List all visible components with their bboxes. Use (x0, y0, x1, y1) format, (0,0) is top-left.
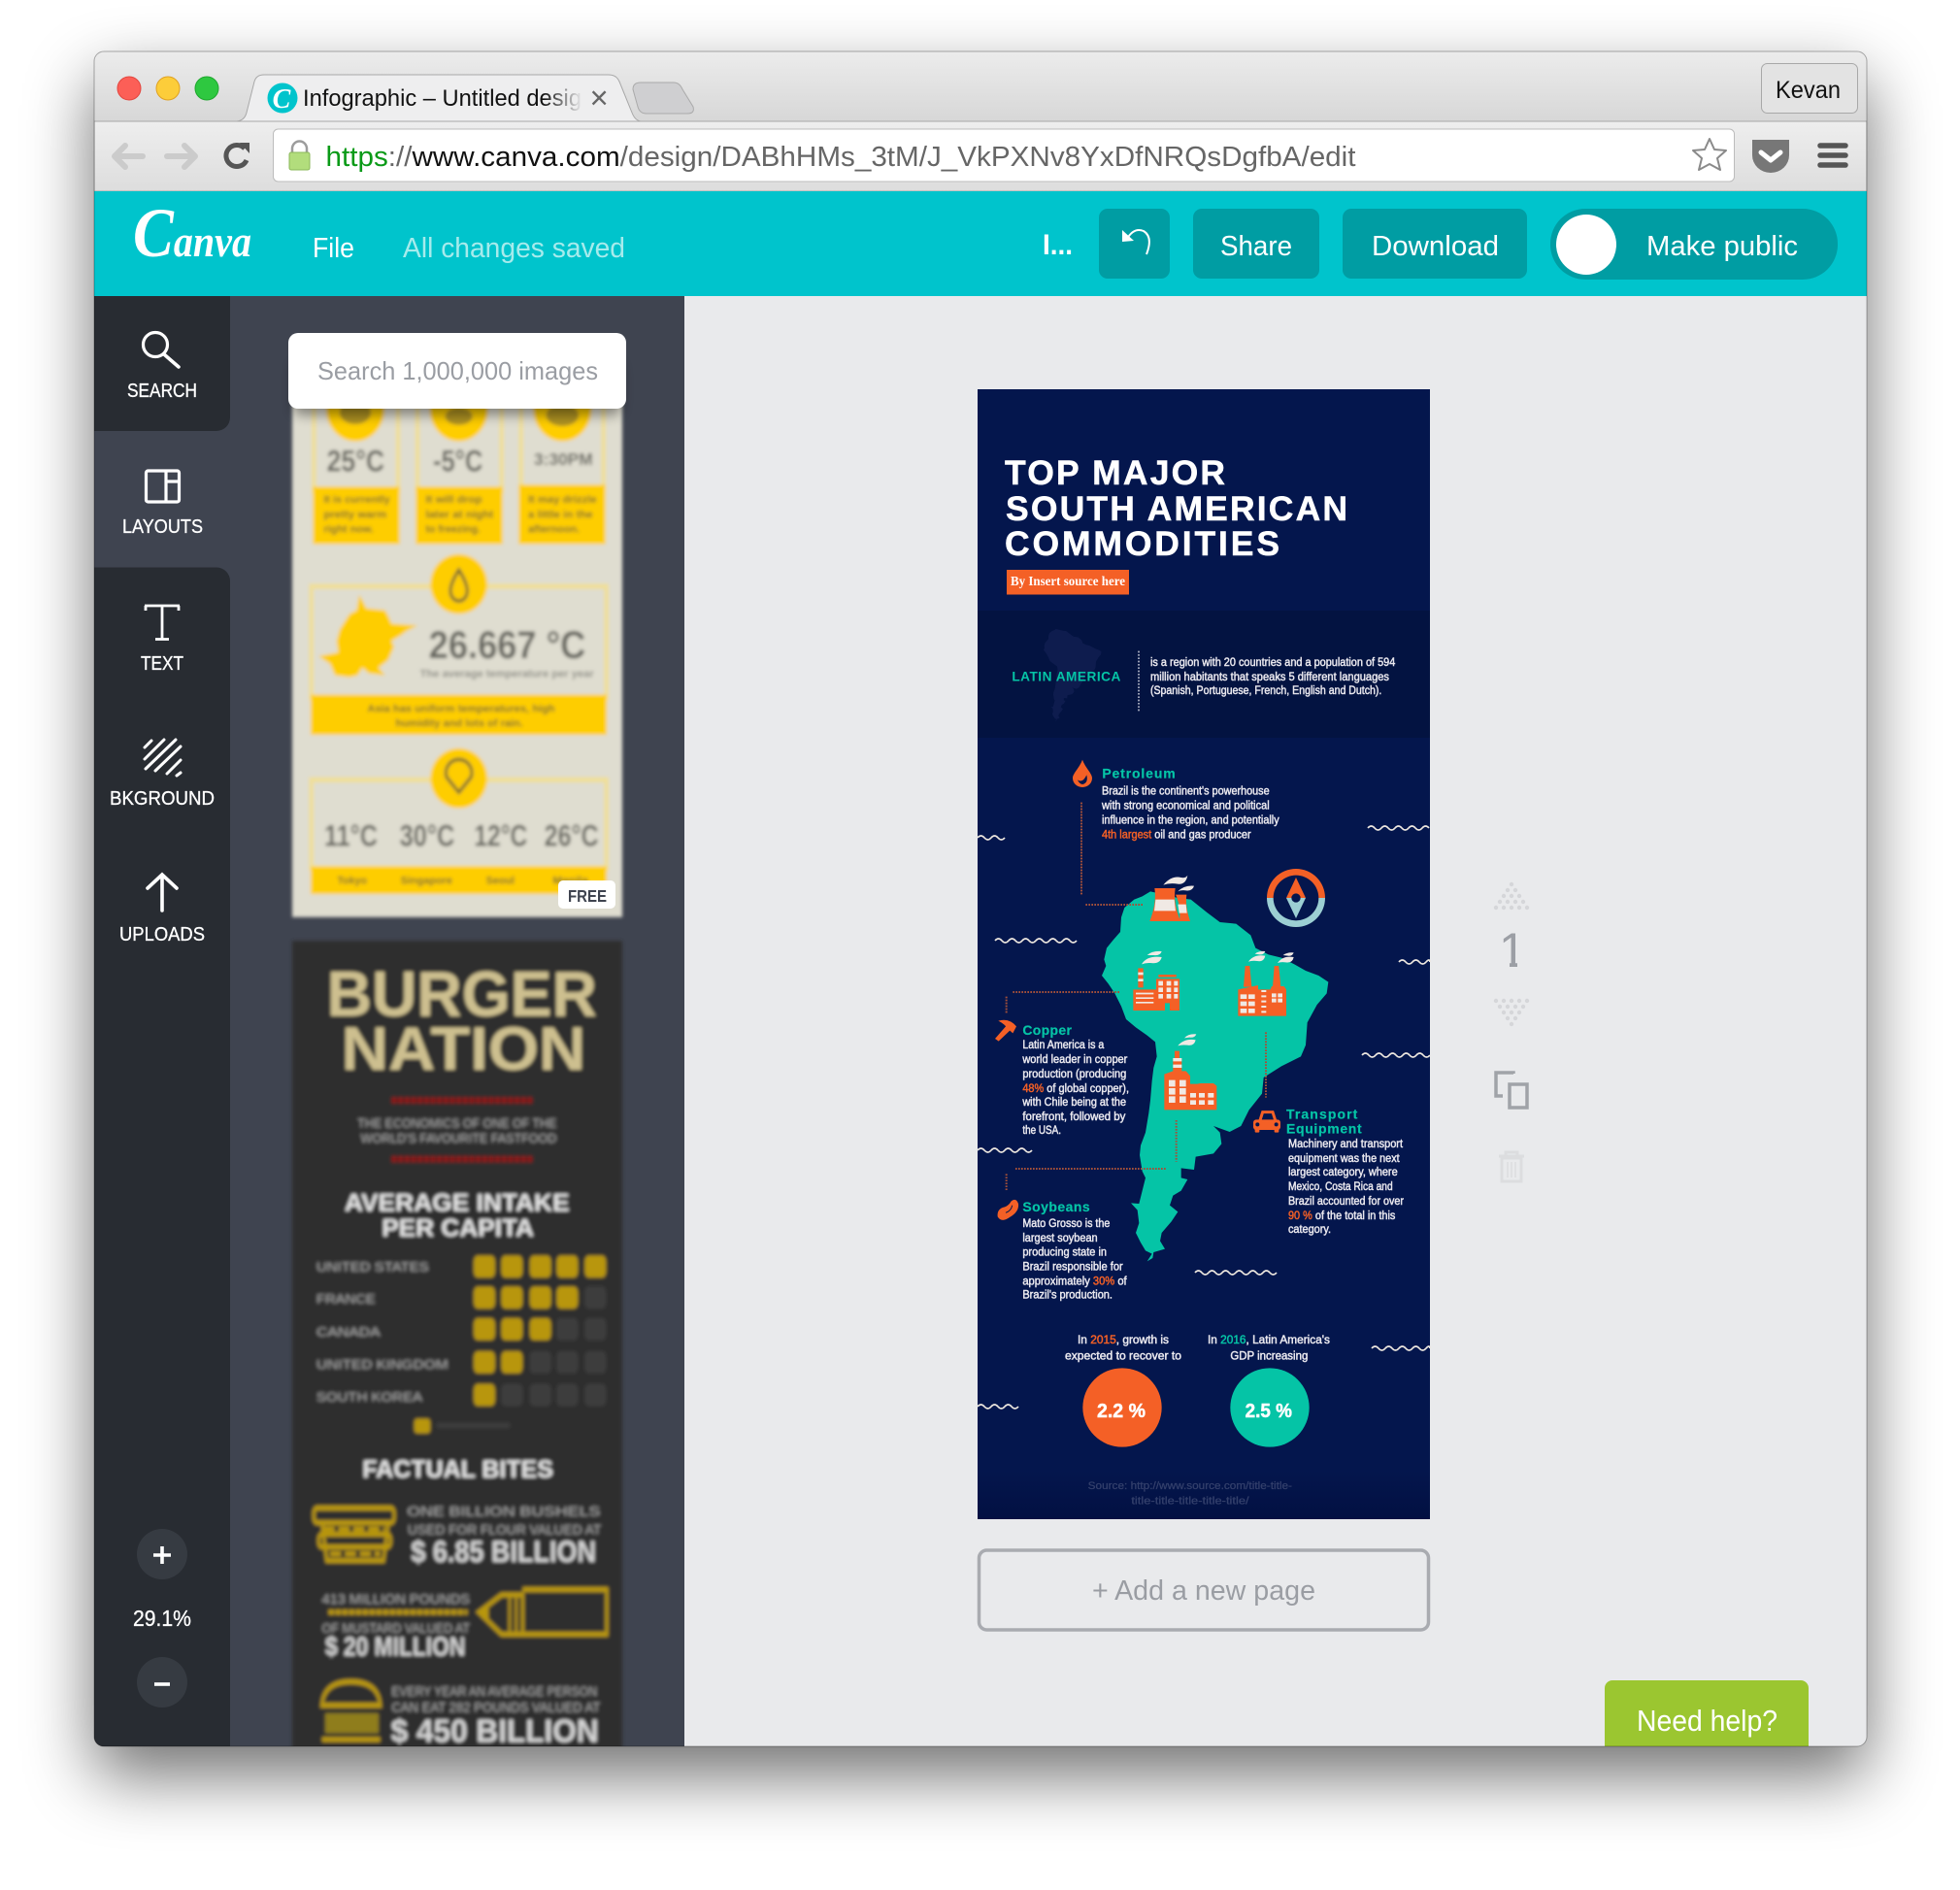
template thumbnail: burger nation: USED FOR FLOUR VALUED AT (408, 1523, 601, 1538)
template thumbnail: weather: 30°C (400, 820, 454, 853)
template thumbnail: burger nation: WORLD'S FAVOURITE FASTFOOD (361, 1132, 557, 1145)
icon: pocket (1752, 140, 1789, 173)
Canva logo: Canva (133, 194, 251, 272)
zoom level: 29.1% (133, 1606, 191, 1631)
copper text: 48% of global copper), (1022, 1081, 1129, 1095)
source note: title-title-title-title-title/ (1131, 1495, 1250, 1507)
text tab (141, 606, 183, 675)
File menu: File (313, 233, 354, 264)
icon: compass (1267, 869, 1325, 927)
template thumbnail: weather: 26°C (545, 820, 599, 853)
footer band background (978, 1471, 1430, 1519)
template thumbnail: burger nation: PER CAPITA (382, 1215, 534, 1242)
soybeans text: approximately 30% of (1022, 1274, 1127, 1287)
uploads tab: UPLOADS (119, 924, 205, 945)
template thumbnail: weather: -5°C (433, 445, 482, 479)
search input (288, 333, 626, 415)
petroleum text (1101, 783, 1279, 841)
latin america description: million habitants that speaks 5 different languages (1150, 670, 1389, 683)
undo button (1099, 209, 1170, 279)
title: SOUTH AMERICAN (1006, 489, 1347, 528)
make public toggle: Make public (1646, 231, 1798, 262)
copper text: Latin America is a (1022, 1038, 1105, 1051)
search tab (127, 332, 197, 402)
download button: Download (1372, 231, 1499, 262)
icon: hammer (995, 1020, 1016, 1042)
template thumbnail: weather: humidity and lots of rain. (395, 718, 523, 730)
template thumbnail: burger nation: $ 6.85 BILLION (411, 1534, 596, 1569)
template thumbnail: burger nation: FACTUAL BITES (362, 1456, 553, 1483)
zoom in button (137, 1529, 187, 1579)
top navigation bar (94, 191, 1867, 296)
transport text: category. (1288, 1222, 1331, 1236)
download button (1343, 209, 1527, 279)
infographic page (978, 389, 1430, 1519)
wave decorations (978, 826, 1430, 1409)
latin america description: is a region with 20 countries and a population of 594 (1150, 655, 1396, 669)
tab close: × (590, 80, 609, 116)
template thumbnail: weather: It is currently (323, 494, 390, 506)
left tool sidebar (94, 296, 230, 1746)
transport text: Mexico, Costa Rica and (1288, 1179, 1393, 1193)
transport text (1288, 1137, 1404, 1236)
soybeans text: Brazil responsible for (1022, 1259, 1123, 1273)
tab title: Infographic – Untitled desig (303, 85, 581, 112)
search input: Search 1,000,000 images (317, 356, 598, 385)
free badge (558, 880, 615, 909)
icon: duplicate page (1496, 1073, 1527, 1108)
layouts tab (122, 471, 203, 538)
icon: soybean (998, 1200, 1018, 1220)
search tab: SEARCH (127, 381, 197, 402)
stat circle 2.5%: 2.5 % (1246, 1400, 1292, 1422)
icon: factory west (1133, 951, 1179, 1011)
free badge: FREE (568, 886, 607, 906)
template thumbnail: burger nation: 413 MILLION POUNDS (322, 1592, 470, 1608)
transport heading: Equipment (1286, 1120, 1362, 1136)
template thumbnail: burger nation: AVERAGE INTAKE (345, 1190, 570, 1216)
soybeans text: Brazil's production. (1022, 1287, 1113, 1301)
template thumbnail: weather: 26.667 °C (429, 623, 585, 667)
stat circle 2.5% (1230, 1368, 1310, 1447)
need help button: Need help? (1637, 1704, 1777, 1738)
icon: forward arrow (167, 146, 195, 167)
add a new page button: + Add a new page (1092, 1575, 1315, 1607)
soybeans text: Mato Grosso is the (1022, 1216, 1111, 1230)
template thumbnail: weather: 12°C (474, 820, 527, 853)
icon: lock (289, 142, 310, 170)
icon: cooling towers (1149, 876, 1194, 921)
bottom stats (1065, 1333, 1330, 1507)
template thumbnail: weather: afternoon. (528, 524, 580, 536)
add a new page button (979, 1550, 1429, 1630)
icon: factory east (1238, 951, 1294, 1016)
petroleum text: Brazil is the continent's powerhouse (1102, 783, 1270, 797)
source tag (1007, 570, 1129, 594)
favicon: C (273, 84, 291, 115)
template thumbnail: weather: 11°C (324, 820, 378, 853)
copper text: the USA. (1022, 1123, 1061, 1137)
title (1005, 453, 1347, 563)
copper text: production (producing (1022, 1067, 1126, 1080)
zoom out button (137, 1657, 187, 1708)
collapsed title: I... (1043, 229, 1073, 261)
latin america label: LATIN AMERICA (1012, 670, 1120, 684)
soybeans text: producing state in (1022, 1244, 1107, 1258)
active tab (237, 75, 641, 121)
template thumbnail: burger nation: CANADA (316, 1325, 382, 1340)
page number: 1 (1499, 923, 1526, 978)
page down control (1494, 999, 1529, 1026)
transport text: equipment was the next (1288, 1151, 1400, 1165)
source note: Source: http://www.source.com/title-title- (1088, 1480, 1292, 1492)
template thumbnail: weather: It may drizzle (528, 494, 597, 506)
share button: Share (1220, 231, 1292, 262)
copper text (1021, 1038, 1129, 1137)
layouts tab: LAYOUTS (122, 516, 203, 538)
background tab (110, 740, 215, 810)
template thumbnail: weather: Tokyo (337, 876, 367, 887)
template thumbnail: weather: It will drop (425, 494, 482, 506)
latin america block (1012, 651, 1396, 841)
inactive tab (633, 83, 693, 114)
stat text 2016 (1208, 1333, 1330, 1362)
copper heading: Copper (1022, 1022, 1073, 1038)
make public toggle (1550, 209, 1838, 280)
text tab: TEXT (141, 653, 183, 675)
south america map (1102, 891, 1328, 1261)
soybeans text (1022, 1216, 1127, 1301)
copper text: with Chile being at the (1021, 1095, 1126, 1109)
template thumbnail: burger nation: SOUTH KOREA (316, 1391, 423, 1405)
template thumbnail: burger nation: THE ECONOMICS OF ONE OF THE (357, 1117, 556, 1131)
stat text 2015: In 2015, growth is (1078, 1333, 1169, 1346)
template thumbnail: weather: Singapore (401, 876, 452, 887)
profile button (1761, 64, 1858, 113)
template thumbnail: burger nation: ONE BILLION BUSHELS (407, 1505, 601, 1519)
copper text: forefront, followed by (1022, 1110, 1125, 1123)
icon: reload (226, 143, 249, 167)
profile button: Kevan (1776, 77, 1841, 104)
URL: https://www.canva.com /design/DABhHMs_3tM/J_VkPXNv8YxDfNRQsDgfbA/edit (326, 142, 1356, 173)
template thumbnail: burger nation: BURGER (327, 957, 597, 1030)
page up control (1494, 882, 1529, 910)
icon: menu (1820, 146, 1845, 165)
transport text: largest category, where (1288, 1165, 1398, 1178)
template thumbnail: weather: Asia has uniform temperatures, high (367, 704, 555, 715)
workspace background (684, 296, 1867, 1746)
latin america description (1150, 655, 1396, 697)
template thumbnail: burger nation: OF MUSTARD VALUED AT (322, 1621, 470, 1637)
leader lines (1007, 803, 1266, 1190)
icon: car (1253, 1112, 1280, 1133)
template thumbnail: burger nation: NATION (342, 1014, 585, 1083)
tab strip (94, 51, 1867, 121)
template thumbnail: burger nation: FRANCE (316, 1293, 376, 1307)
background tab: BKGROUND (110, 788, 215, 810)
template thumbnail: weather: 3:30PM (534, 450, 593, 469)
template thumbnail: burger nation: CAN EAT 282 POUNDS VALUED AT (391, 1700, 600, 1715)
need help button (1605, 1680, 1809, 1746)
template thumbnail: burger nation: $ 20 MILLION (325, 1631, 465, 1661)
template thumbnail: weather: pretty warm (323, 510, 386, 521)
petroleum text: 4th largest oil and gas producer (1102, 827, 1251, 841)
icon: bookmark star (1693, 139, 1726, 170)
template thumbnail: weather: 25°C (327, 445, 384, 479)
template thumbnail: weather: later at night (425, 510, 494, 521)
address bar (274, 129, 1734, 182)
map section (995, 803, 1404, 1301)
source note (1088, 1480, 1292, 1507)
transport text: Brazil accounted for over (1288, 1194, 1404, 1208)
title: TOP MAJOR (1005, 453, 1225, 492)
soybeans text: largest soybean (1022, 1231, 1098, 1244)
title: COMMODITIES (1005, 524, 1279, 563)
template thumbnail: burger nation (292, 941, 622, 1762)
save status: All changes saved (403, 233, 625, 264)
template thumbnail: weather: Seoul (486, 876, 515, 887)
icon: delete page (1499, 1152, 1524, 1181)
transport text: Machinery and transport (1288, 1137, 1404, 1150)
icon: back arrow (115, 146, 143, 167)
petroleum text: with strong economical and political (1101, 798, 1270, 812)
icon: oil drop (1073, 760, 1092, 787)
template thumbnail: burger nation: UNITED KINGDOM (316, 1358, 448, 1372)
latin america description: (Spanish, Portuguese, French, English and Dutch). (1150, 683, 1381, 697)
soybeans heading: Soybeans (1022, 1199, 1090, 1214)
traffic lights (117, 77, 218, 100)
stat text 2016: GDP increasing (1230, 1348, 1308, 1362)
template thumbnail: weather: to freezing. (425, 524, 481, 536)
template panel background (94, 296, 684, 1746)
dotted divider (1136, 651, 1142, 713)
stat circle 2.2%: 2.2 % (1097, 1400, 1146, 1422)
latin america band background (978, 611, 1430, 738)
stat text 2015 (1065, 1333, 1181, 1362)
faint map silhouette (1044, 629, 1102, 721)
stat text 2015: expected to recover to (1065, 1348, 1181, 1362)
icon: factory south (1164, 1034, 1216, 1110)
template panel (292, 346, 622, 1762)
stat circle 2.2% (1082, 1368, 1162, 1447)
template thumbnail: weather: Manila (552, 876, 588, 887)
template thumbnail: burger nation: EVERY YEAR AN AVERAGE PERSON (391, 1684, 597, 1700)
transport heading (1286, 1106, 1362, 1136)
template thumbnail: burger nation: UNITED STATES (316, 1261, 429, 1275)
copper text: world leader in copper (1021, 1052, 1127, 1066)
transport text: 90 % of the total in this (1288, 1209, 1395, 1222)
stat text 2016: In 2016, Latin America's (1208, 1333, 1330, 1346)
template thumbnail: weather: The average temperature per year (420, 669, 594, 680)
source tag: By Insert source here (1011, 575, 1125, 589)
uploads tab (119, 875, 205, 945)
template thumbnail: weather: a little in the (528, 510, 593, 521)
template thumbnail: weather (292, 346, 622, 917)
share button (1193, 209, 1319, 279)
template thumbnail: weather: right now. (323, 524, 374, 536)
toolbar (94, 121, 1867, 191)
petroleum text: influence in the region, and potentially (1102, 812, 1279, 826)
favicon (268, 83, 297, 115)
transport heading: Transport (1286, 1106, 1358, 1121)
petroleum heading: Petroleum (1102, 766, 1176, 781)
template thumbnail: burger nation: $ 450 BILLION (391, 1713, 599, 1749)
